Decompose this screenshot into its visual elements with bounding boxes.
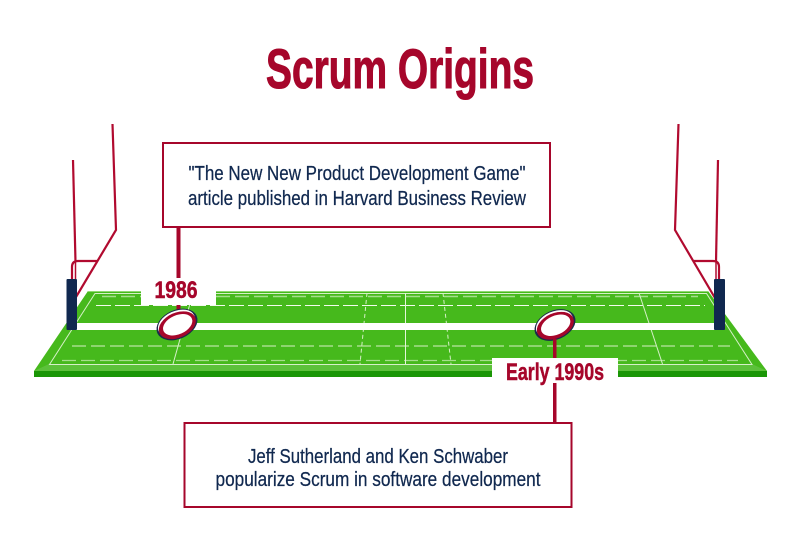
callout 1986	[163, 143, 550, 227]
left goal post	[66, 124, 116, 330]
callout early 1990s: Jeff Sutherland and Ken Schwaber	[248, 446, 508, 468]
label 1986: 1986	[154, 277, 198, 304]
right goal post	[675, 124, 725, 330]
label early 1990s: Early 1990s	[506, 359, 604, 386]
callout 1986: article published in Harvard Business Review	[188, 188, 526, 210]
callout 1986: "The New New Product Development Game"	[188, 163, 526, 185]
callout early 1990s: popularize Scrum in software development	[216, 469, 541, 491]
rugby ball left	[151, 303, 203, 346]
rugby field	[34, 291, 767, 377]
connector 1986	[176, 227, 180, 312]
title: Scrum Origins	[266, 37, 534, 100]
label 1986	[141, 277, 216, 305]
callout early 1990s	[184, 423, 572, 507]
connector early 1990s	[553, 339, 556, 423]
rugby ball right	[529, 303, 581, 347]
